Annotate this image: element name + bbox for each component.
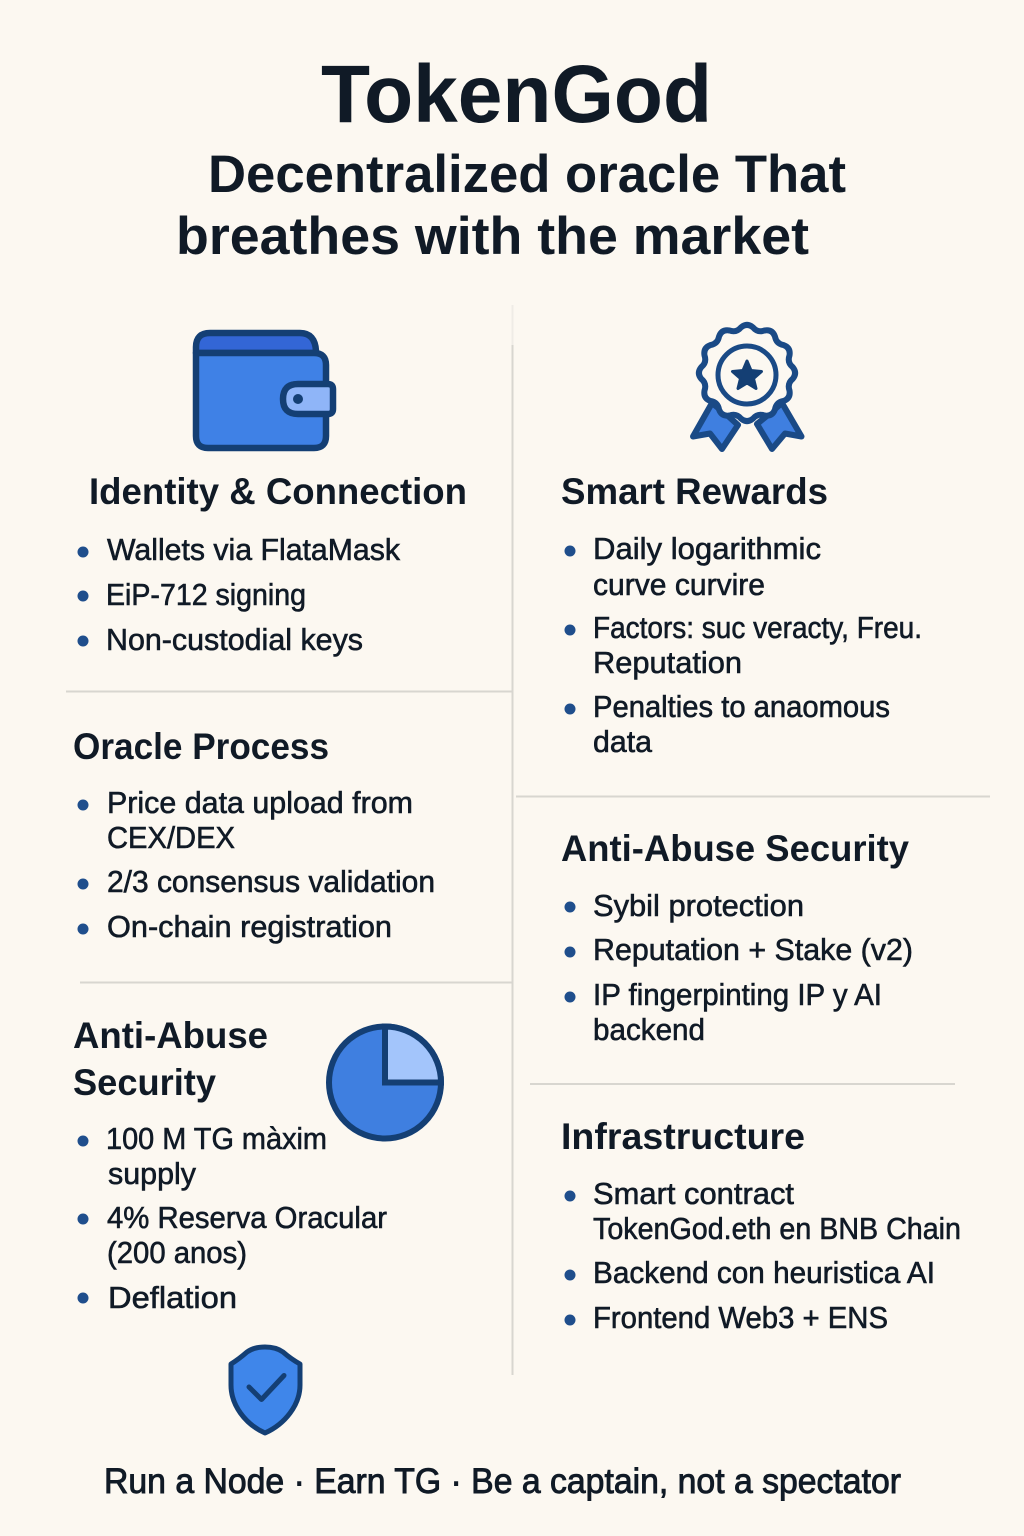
title: breathes with the market <box>176 207 809 266</box>
heading: anti-abuse security left: Security <box>73 1062 216 1103</box>
bullet: supply <box>78 1121 327 1191</box>
heading: infrastructure: Infrastructure <box>561 1116 805 1157</box>
bullet: price data <box>78 785 413 855</box>
bullet: reserve <box>78 1200 387 1270</box>
bullet: supply: supply <box>108 1156 196 1191</box>
bullet: penalties: data <box>593 724 653 759</box>
heading: anti-abuse security left <box>73 1015 268 1103</box>
bullet: registration: On-chain registration <box>107 909 392 944</box>
title: TokenGod <box>321 49 712 140</box>
bullet: reserve: (200 anos) <box>107 1235 247 1270</box>
bullet: smart contract: TokenGod.eth en BNB Chain <box>593 1211 961 1246</box>
heading: oracle process: Oracle Process <box>73 726 329 767</box>
bullet: smart contract <box>564 1176 961 1246</box>
heading: anti-abuse security right: Anti-Abuse Security <box>561 828 909 869</box>
bullet: deflation: Deflation <box>108 1280 237 1315</box>
panel: identity and connection <box>78 333 467 657</box>
heading: identity and connection: Identity & Connection <box>89 471 467 512</box>
bullet: sybil: Sybil protection <box>593 888 804 923</box>
bullet: wallets: Wallets via FlataMask <box>107 532 400 567</box>
bullet: supply: 100 M TG màxim <box>106 1121 327 1156</box>
bullet: fingerprinting <box>564 977 882 1047</box>
bullet: daily curve: curve curvire <box>593 567 765 602</box>
heading: anti-abuse security left: Anti-Abuse <box>73 1015 268 1056</box>
bullet: reputation and stake: Reputation + Stake (v2) <box>593 932 913 967</box>
bullet: factors <box>564 610 922 680</box>
bullet: daily curve: Daily logarithmic <box>593 531 821 566</box>
footer call to action: Run a Node · Earn TG · Be a captain, not a spectator <box>104 1462 901 1501</box>
bullet: factors: Reputation <box>593 645 742 680</box>
bullet: signing: EiP-712 signing <box>106 577 306 612</box>
bullet: frontend: Frontend Web3 + ENS <box>593 1300 888 1335</box>
icon: award badge <box>693 325 802 449</box>
bullet: consensus: 2/3 consensus validation <box>107 864 435 899</box>
heading: smart rewards: Smart Rewards <box>561 471 828 512</box>
bullet: backend: Backend con heuristica AI <box>593 1255 935 1290</box>
panel: smart rewards <box>561 325 922 759</box>
bullet: penalties: Penalties to anaomous <box>593 689 890 724</box>
bullet: smart contract: Smart contract <box>593 1176 794 1211</box>
panel: oracle process <box>73 726 435 944</box>
panel: anti-abuse security left <box>73 1015 441 1315</box>
bullet: factors: Factors: suc veracty, Freu. <box>593 610 922 645</box>
panel: infrastructure <box>561 1116 961 1335</box>
icon: wallet <box>196 333 333 448</box>
icon: shield <box>231 1347 300 1433</box>
bullet: fingerprinting: backend <box>593 1012 705 1047</box>
title: Decentralized oracle That <box>208 145 846 204</box>
icon: pie chart <box>329 1026 441 1138</box>
bullet: price data: Price data upload from <box>107 785 413 820</box>
bullet: reserve: 4% Reserva Oracular <box>107 1200 387 1235</box>
bullet: daily curve <box>564 531 821 602</box>
bullet: keys: Non-custodial keys <box>106 622 363 657</box>
bullet: price data: CEX/DEX <box>107 820 235 855</box>
bullet: fingerprinting: IP fingerpinting IP y AI <box>593 977 882 1012</box>
bullet: penalties <box>564 689 890 759</box>
panel: anti-abuse security right <box>561 828 913 1047</box>
title <box>176 49 846 266</box>
